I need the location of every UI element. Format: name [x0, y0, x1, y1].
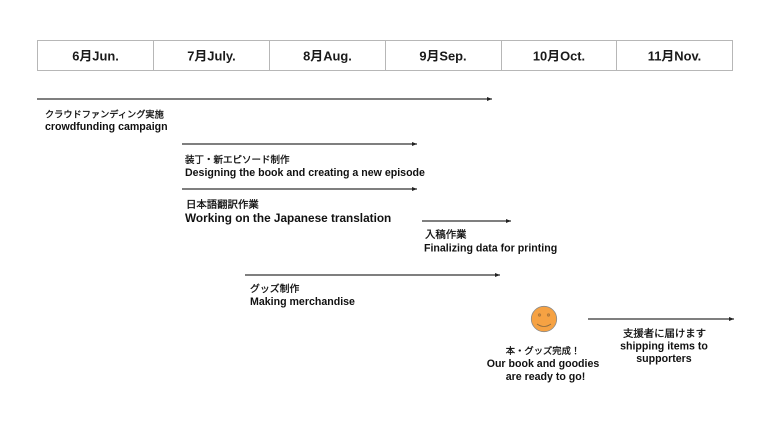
task: making merchandise — [245, 275, 500, 308]
task: designing the book — [182, 144, 425, 179]
task: shipping items: 支援者に届けます — [623, 327, 706, 340]
task: making merchandise: Making merchandise — [250, 296, 355, 308]
milestone: book and goodies complete — [487, 345, 599, 383]
month header table: 8月Aug. — [303, 48, 352, 64]
task: crowdfunding campaign: クラウドファンディング実施 — [45, 108, 164, 120]
task: designing the book: 装丁・新エピソード制作 — [185, 154, 290, 166]
task: shipping items: shipping items to — [620, 340, 708, 352]
task: crowdfunding campaign — [37, 99, 492, 133]
month header table: 11月Nov. — [648, 48, 701, 64]
icon: smiley face — [531, 306, 557, 332]
month header table: 9月Sep. — [419, 48, 467, 64]
milestone: book and goodies complete: Our book and goodies — [487, 358, 599, 370]
task: designing the book: Designing the book and creating a new episode — [185, 167, 425, 179]
task: Japanese translation: Working on the Japanese translation — [185, 211, 391, 225]
milestone: book and goodies complete: are ready to go! — [506, 371, 585, 383]
task: finalizing data — [422, 221, 557, 254]
month header table: 10月Oct. — [533, 48, 585, 64]
task: Japanese translation — [182, 189, 417, 225]
month header table — [38, 40, 732, 70]
task: crowdfunding campaign: crowdfunding campaign — [45, 121, 168, 133]
task: shipping items: supporters — [636, 353, 692, 365]
task: making merchandise: グッズ制作 — [250, 282, 300, 295]
milestone: book and goodies complete: 本・グッズ完成！ — [506, 345, 580, 356]
task: shipping items — [588, 319, 734, 365]
task: finalizing data: 入稿作業 — [425, 228, 467, 241]
month header table: 7月July. — [187, 48, 236, 64]
task: Japanese translation: 日本語翻訳作業 — [186, 198, 259, 211]
month header table: 6月Jun. — [72, 48, 119, 64]
task: finalizing data: Finalizing data for printing — [424, 242, 557, 254]
